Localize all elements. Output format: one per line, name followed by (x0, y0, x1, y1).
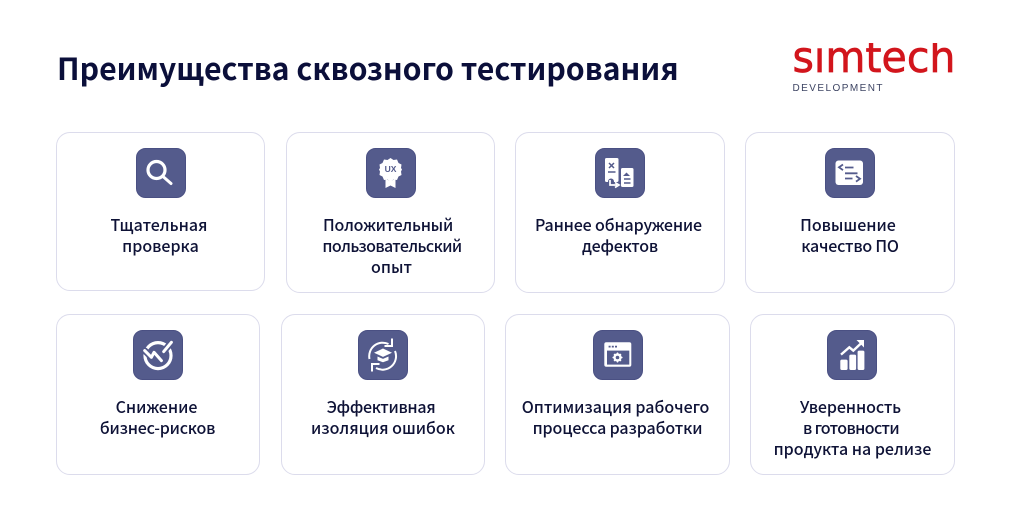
label (322, 212, 462, 278)
icon: documents (595, 148, 645, 198)
label: Тщательная (111, 212, 207, 236)
icon: browser gear (593, 330, 643, 380)
label: Снижение (116, 394, 197, 418)
label: проверка (122, 233, 199, 257)
label: изоляция ошибок (311, 415, 455, 439)
panel: thorough check (56, 132, 265, 291)
panel: quality (745, 132, 955, 293)
label: пользовательский (322, 233, 462, 257)
panel: fault isolation (281, 314, 485, 475)
icon: code list (825, 148, 875, 198)
icon: UX badge: UX (385, 164, 397, 174)
label: качество ПО (801, 233, 899, 257)
panel: workflow optimization (505, 314, 730, 475)
icon: cycle cap (358, 330, 408, 380)
icon: growth chart (827, 330, 877, 380)
label (111, 212, 207, 257)
label: процесса разработки (533, 415, 702, 439)
logo: DEVELOPMENT (792, 83, 882, 94)
label: дефектов (582, 233, 658, 257)
label: Оптимизация рабочего (522, 394, 709, 418)
label: продукта на релизе (774, 436, 931, 460)
label (522, 394, 709, 439)
label (100, 394, 215, 439)
label (800, 212, 899, 257)
panel: reduced risks (56, 314, 260, 475)
icon: risk target (133, 330, 183, 380)
label (311, 394, 455, 439)
label: опыт (371, 254, 412, 278)
panel: positive UX (286, 132, 495, 293)
label (535, 212, 702, 257)
label: бизнес-рисков (100, 415, 215, 439)
panel: release confidence (750, 314, 955, 475)
title: Преимущества сквозного тестирования (57, 45, 679, 89)
label: Эффективная (327, 394, 435, 418)
label: Уверенность (800, 394, 901, 418)
label: Повышение (800, 212, 896, 236)
label: Раннее обнаружение (535, 212, 702, 236)
label: Положительный (323, 212, 453, 236)
label (774, 394, 931, 460)
icon: magnifier (136, 148, 186, 198)
label: в готовности (803, 415, 899, 439)
icon: UX badge (366, 148, 416, 198)
panel: early detection (515, 132, 725, 293)
